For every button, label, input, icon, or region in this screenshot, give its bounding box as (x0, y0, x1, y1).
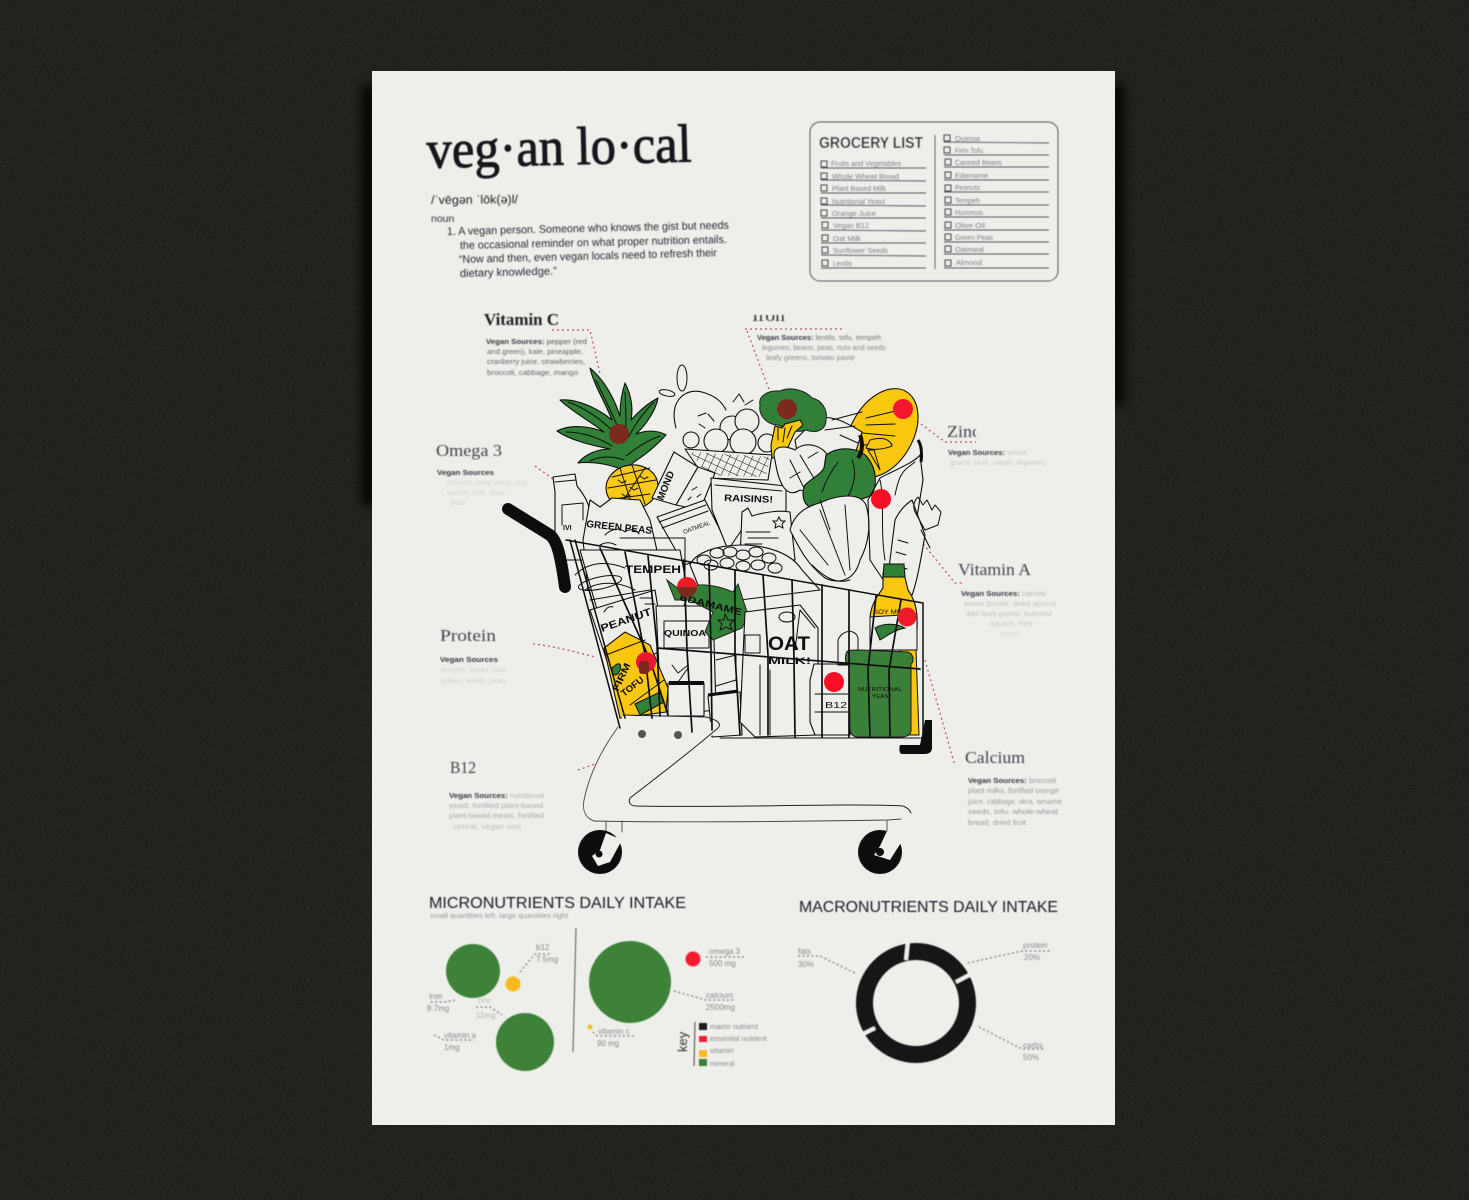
bubble: zinc (476, 996, 554, 1071)
callout: vitamin A: Vitamin A (958, 560, 1032, 579)
bubble: vitamin C: 90 mg (597, 1039, 619, 1048)
callout: protein: Vegan Sources (440, 655, 498, 664)
nutritional yeast tub (845, 650, 919, 737)
label: vitamin A (434, 1031, 477, 1052)
label: carbs: carbs (1023, 1041, 1043, 1050)
callout: zinc (947, 422, 1045, 467)
raisins box: RAISINS! (724, 493, 773, 506)
right column items: Canned Beans (955, 160, 1002, 167)
left column items: Vegan B12 (833, 223, 869, 230)
front corner bracket (899, 720, 932, 754)
bubble: vitamin C (588, 1024, 634, 1048)
definition text: the occasional reminder on what proper nutrition entails. (460, 234, 727, 252)
almond box: MOND (656, 470, 677, 502)
bubble: iron (427, 944, 500, 1013)
tempeh package: TEMPEH (625, 564, 681, 576)
soy milk bottle (870, 564, 917, 650)
nutrient markers (609, 399, 916, 692)
bubble: zinc: zinc (477, 996, 491, 1005)
callout: calcium: Vegan Sources: broccoli (968, 776, 1056, 785)
callout: zinc: Zinc (947, 422, 980, 441)
illustration: shopping cart with groceries (508, 365, 941, 874)
legend: key: essential nutrient (710, 1034, 768, 1043)
nutritional yeast tub: NUTRITIONAL (858, 687, 902, 693)
firm tofu package (604, 632, 668, 718)
nutrient leader lines (533, 329, 976, 770)
callout: B12: B12 (450, 758, 476, 777)
panel: macronutrients daily intake (798, 899, 1058, 1062)
callout: B12: plant-based meats, fortified (449, 811, 544, 820)
lettuce (790, 496, 869, 581)
panel: micronutrients daily intake (427, 895, 768, 1071)
oat milk carton (740, 605, 818, 737)
label: vitamin A: vitamin a (444, 1031, 477, 1040)
callout: protein (440, 626, 506, 685)
green peas bag: GREEN PEAS (586, 519, 653, 537)
label: carbs: 50% (1023, 1053, 1039, 1062)
B12 bottle (810, 631, 858, 735)
bubble: calcium: 2500mg (706, 1003, 735, 1012)
callout: iron (752, 314, 886, 362)
carrots and radish (868, 440, 941, 610)
callout: vitamin A: squash, Red (990, 619, 1032, 628)
jars (668, 683, 742, 737)
callout: B12: cereal, vegan nori (453, 822, 521, 831)
oatmeal bag (657, 500, 730, 565)
edamame bag (667, 580, 748, 640)
callout: iron: Iron (752, 306, 786, 325)
label: fats (798, 947, 855, 973)
raisins box (711, 478, 795, 560)
title block (426, 114, 729, 280)
bubble: vitamin C: vitamin c (598, 1027, 630, 1036)
callout: protein: tempeh, seitan, nuts (441, 665, 506, 674)
callout: iron: Vegan Sources: lentils, tofu, tempeh (757, 333, 881, 342)
citrus and berries (659, 365, 776, 455)
callout: vitamin A: Vegan Sources: carrots (961, 589, 1046, 598)
label: carbs (979, 1027, 1045, 1062)
bubble: b12 (506, 943, 558, 992)
callout: vitamin C: Vegan Sources: pepper (red (486, 337, 587, 346)
right column items: Hummus (955, 210, 983, 217)
legend: key (675, 1022, 768, 1068)
peanut bag: PEANUT (599, 606, 654, 635)
callout: calcium: Calcium (965, 748, 1025, 767)
cart handle (508, 509, 565, 587)
part of speech: noun (431, 213, 455, 225)
definition text: “Now and then, even vegan locals need to refresh their (459, 247, 717, 266)
label: protein: protein (1023, 941, 1047, 950)
cart chassis (583, 715, 930, 832)
right column items: Firm Tofu (955, 148, 983, 155)
green peas bag (583, 498, 658, 590)
right column items: Green Peas (955, 235, 994, 242)
edamame bag: EDAMAME (678, 592, 743, 618)
bubble: iron: 8.7mg (427, 1004, 449, 1013)
left column items: Plant Based Milk (832, 186, 887, 193)
legend: key: macro nutrient (710, 1022, 759, 1031)
almond box (652, 452, 715, 510)
left column items: Oat Milk (833, 236, 862, 243)
paper shadow (362, 85, 1124, 505)
legend: key: key (675, 1031, 690, 1052)
callout: calcium: bread, dried fruit (968, 818, 1026, 827)
bubble: omega 3: 500 mg (709, 959, 736, 968)
right column items (944, 135, 1049, 268)
callout: omega 3: bean (450, 498, 466, 507)
cart wire basket (566, 540, 923, 737)
basket with mesh (685, 449, 772, 480)
oat milk carton: MILK! (768, 656, 811, 667)
callout: vitamin C: broccoli, cabbage, mango (487, 368, 578, 377)
callout: vitamin C: cranberry juice, strawberries, (487, 357, 585, 366)
callout: vitamin C: and green), kale, pineapple, (487, 347, 583, 356)
callout: protein: Protein (440, 626, 497, 645)
B12 bottle: B12 (825, 700, 847, 710)
label: protein (968, 941, 1052, 963)
right column items: Peanuts (955, 185, 980, 192)
left column items (821, 161, 926, 268)
right column items: Almond (956, 260, 982, 267)
callout: omega 3 (436, 441, 528, 507)
callout: omega 3: Vegan Sources (437, 468, 494, 477)
left column items: Whole Wheat Bread (832, 174, 899, 181)
callout: calcium: seeds, tofu, whole-wheat (968, 807, 1058, 816)
callout: zinc: Vegan Sources: whole (948, 448, 1027, 457)
callout: calcium: juice, cabbage, okra, sesame (967, 797, 1062, 806)
callout: vitamin A: dark leafy greens, butternut (966, 609, 1052, 618)
macronutrients heading: MACRONUTRIENTS DAILY INTAKE (799, 899, 1058, 916)
oatmeal bag: OATMEAL (683, 520, 712, 536)
firm tofu package: FIRM (611, 661, 633, 693)
right column items: Tempeh (955, 198, 980, 205)
quinoa box: QUINOA (664, 629, 706, 638)
peanut bag (590, 590, 665, 670)
callout: iron: legumes, beans, peas, nuts and seeds (762, 343, 886, 352)
bubble: iron: iron (429, 992, 442, 1001)
bell pepper (803, 435, 892, 507)
nuts pile (690, 545, 820, 600)
bubble: omega 3 (686, 947, 744, 968)
bubble: calcium (589, 941, 736, 1023)
micronutrients subtitle: small quantities left, large quantities right (430, 911, 569, 920)
label: fats: 30% (798, 960, 814, 969)
bubble: zinc: 11mg (476, 1011, 495, 1020)
right column items: Edamame (955, 173, 988, 180)
definition text: dietary knowledge.” (460, 265, 557, 280)
baguette (831, 376, 933, 490)
bottle behind (553, 474, 590, 560)
left column items: Sunflower Seeds (833, 248, 889, 255)
left column items: Nutritional Yeast (832, 199, 885, 206)
callout: protein: grains, lentils, peas (441, 676, 506, 685)
left column items: Fruits and Vegetables (831, 161, 902, 168)
tempeh package (575, 538, 688, 620)
callout: zinc: grains, nuts, seeds, legumes (950, 458, 1045, 467)
callout: omega 3: flaxseed, hemp seeds, chia (447, 478, 528, 487)
spinach leaves (774, 445, 831, 493)
label: protein: 20% (1024, 953, 1040, 962)
callout: calcium: plant milks, fortified orange (968, 786, 1059, 795)
callout: omega 3: Omega 3 (436, 441, 502, 460)
definition text (447, 220, 729, 280)
nutritional yeast tub: YEAST (872, 694, 893, 700)
callout: iron: leafy greens, tomato paste (766, 353, 855, 362)
left column items: Orange Juice (832, 211, 876, 218)
micronutrients heading: MICRONUTRIENTS DAILY INTAKE (429, 895, 686, 912)
bubble: b12: b12 (536, 943, 550, 952)
callout: vitamin A: sweet potato, dried apricot (964, 599, 1056, 608)
callout: vitamin C: Vitamin C (484, 310, 559, 329)
pineapple (557, 368, 666, 512)
callout: vitamin A: pepper (1000, 629, 1020, 638)
legend: key: mineral (710, 1059, 735, 1068)
callout: omega 3: walnuts, kelp, algae (446, 488, 505, 497)
firm tofu package: TOFU (619, 675, 646, 699)
bubble: omega 3: omega 3 (709, 947, 741, 956)
title: veg·an lo·cal (426, 114, 692, 180)
bubble: b12: 7.5mg (536, 955, 558, 964)
callout: vitamin A (958, 560, 1056, 638)
callout: B12: yeast, fortified plant-based (449, 801, 543, 810)
soy milk bottle: SOY MILK (873, 609, 909, 616)
callout: B12: Vegan Sources: nutritional (449, 791, 544, 800)
panel: grocery list (810, 122, 1058, 281)
right column items: Quinoa (955, 136, 980, 143)
legend: key: vitamin (710, 1046, 734, 1055)
label: vitamin A: 1mg (444, 1043, 460, 1052)
bottle behind: IVI (563, 525, 572, 532)
poster sheet (372, 71, 1115, 1125)
left wheel (578, 830, 622, 874)
label: fats: fats (798, 947, 811, 956)
broccoli (760, 389, 826, 458)
callout: B12 (449, 758, 544, 831)
donut chart (859, 941, 975, 1054)
oat milk label: OAT (768, 634, 810, 655)
definition text: 1. A vegan person. Someone who knows the gist but needs (447, 220, 729, 238)
right wheel (858, 830, 904, 874)
quinoa box (656, 606, 736, 715)
right column items: Oatmeal (955, 247, 984, 254)
callout: vitamin C (484, 310, 587, 377)
grocery list heading: GROCERY LIST (819, 135, 923, 152)
leafy stems behind pepper (795, 412, 862, 470)
bubble: calcium: calcium (706, 991, 733, 1000)
right column items: Olive Oil (955, 223, 985, 230)
left column items: Lentils (833, 261, 852, 268)
callout: calcium (965, 748, 1062, 827)
pronunciation: /ˈvēgən ˈlōk(ə)l/ (431, 192, 519, 207)
